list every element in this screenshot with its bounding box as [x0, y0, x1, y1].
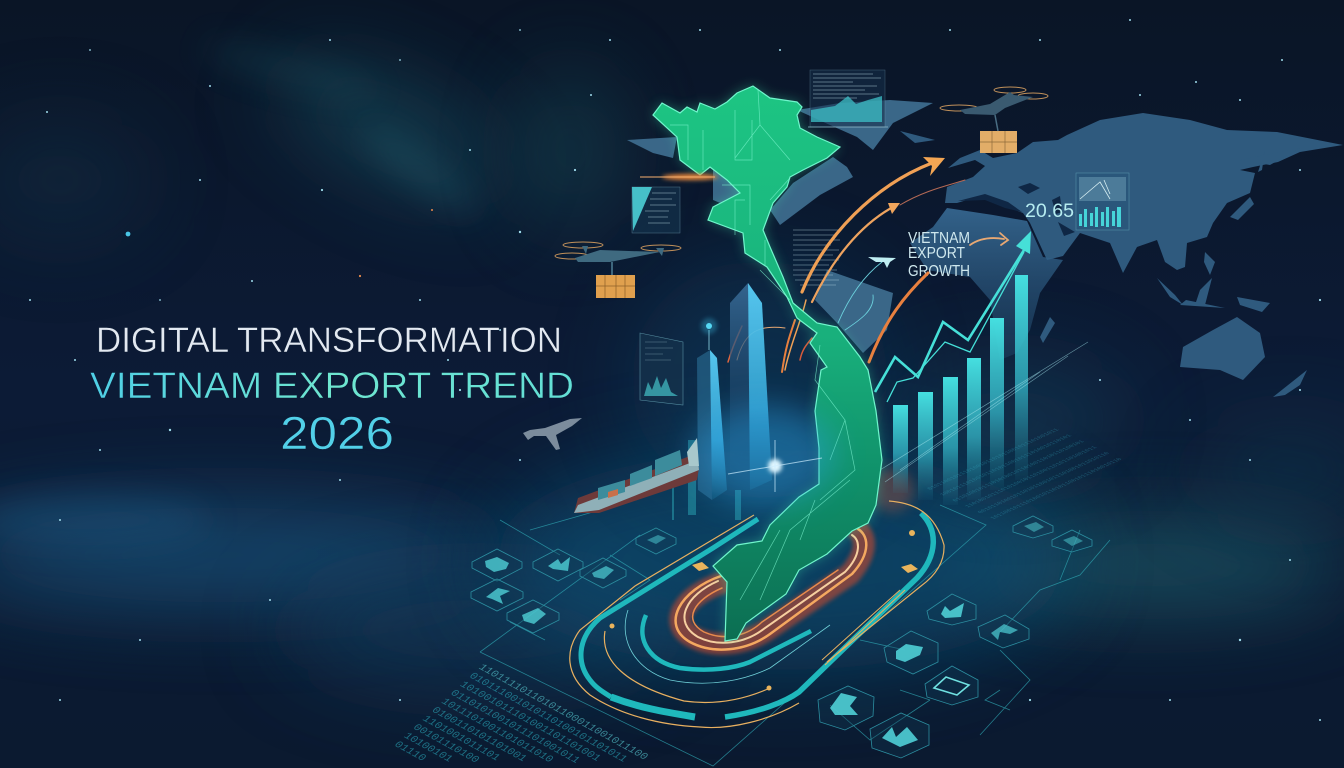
title block — [90, 321, 574, 459]
light beams under towers — [672, 440, 741, 520]
binary code floor: 0110101001011101001011 — [447, 688, 582, 766]
hex icon 8 — [978, 615, 1029, 648]
growth bar chart — [893, 275, 1028, 505]
orange export arrows — [728, 157, 1008, 372]
hex icon 2 — [533, 549, 583, 581]
binary field right: 1001011101001011010110010111010010110101 — [938, 433, 1074, 497]
hex icons group — [471, 516, 1092, 758]
parcel — [980, 131, 1017, 153]
binary code floor: 01110 — [391, 740, 428, 764]
Vietnam: internal circuit lines — [670, 90, 855, 600]
growth trend lines with arrow — [875, 231, 1031, 402]
hex icon 3 — [580, 558, 626, 588]
title line 3: year: 2026 — [280, 407, 394, 459]
hex icon 11 — [818, 686, 874, 730]
binary code floor: 11011110110101100011001011100 — [475, 663, 650, 762]
binary code floor: 10100101 — [400, 731, 455, 765]
hex icon 1 — [472, 549, 522, 581]
map: Eurasia — [945, 113, 1343, 273]
arrow: small label arrow — [970, 233, 1008, 245]
map inset: data chart — [1076, 173, 1129, 230]
Vietnam map — [653, 86, 882, 641]
binary code floor: 0100110101101001 — [428, 706, 529, 764]
chart label: Vietnam export growth: GROWTH — [908, 263, 970, 280]
circuit platform — [480, 505, 1110, 766]
binary field right: 1101001011101010010110100110101101001011 — [963, 445, 1099, 508]
hex icon 4 — [471, 579, 523, 611]
map: Americas and Greenland — [627, 100, 933, 353]
binary field right — [925, 427, 1124, 520]
title line 2: VIETNAM EXPORT TREND — [90, 365, 574, 406]
hex icon 12 — [870, 713, 929, 758]
binary field right: 1011001011101001011010110010111010010110 — [988, 457, 1124, 520]
ring: inner teal band — [642, 615, 811, 670]
hex icon 13 — [1013, 516, 1053, 538]
tower: tall — [730, 283, 772, 490]
world map — [627, 100, 1343, 397]
chart label: Vietnam export growth — [908, 230, 970, 280]
track: orange glow inner ring — [676, 529, 866, 650]
chart label: Vietnam export growth: VIETNAM — [908, 230, 970, 247]
parcel — [596, 275, 635, 298]
orange flare — [640, 174, 718, 180]
light flare at city base — [695, 405, 835, 505]
map value label: 20.65 — [1025, 201, 1074, 222]
hex icon 6 — [636, 528, 676, 554]
airplane — [523, 418, 582, 450]
binary field right: 0110100101110101001011010011010110100101 — [951, 439, 1087, 503]
track: orange thin rings — [570, 501, 944, 728]
ring: outer teal band — [581, 519, 758, 697]
map: Africa — [910, 208, 1063, 360]
tower: small — [697, 350, 727, 500]
drone: left with parcel — [555, 242, 681, 298]
track: markers — [610, 530, 918, 690]
routes: thin cyan to small drone — [838, 262, 882, 330]
thin light streaks across bars — [880, 342, 1088, 482]
title line 1: DIGITAL TRANSFORMATION — [96, 321, 562, 360]
hex icon 7 — [927, 594, 976, 625]
data panel: left with triangle — [632, 187, 680, 233]
hex icon 5 — [507, 600, 559, 633]
binary code floor: 00101110100 — [410, 723, 481, 766]
data panel: text over Americas — [793, 230, 841, 285]
arrow: main to Europe — [802, 157, 945, 292]
arrow: lower to Africa — [869, 273, 928, 362]
data panel: top — [808, 70, 888, 127]
cargo ship — [574, 438, 699, 513]
chart label: Vietnam export growth: EXPORT — [908, 245, 965, 262]
hex icon 10 — [925, 666, 978, 705]
binary field right: 0101100101110100101101011001011101001011 — [925, 427, 1061, 491]
track: teal race rings — [581, 513, 933, 717]
binary code floor: 101001011101001101101001 — [456, 680, 603, 764]
hex icon 9 — [884, 631, 938, 674]
binary code floor — [391, 663, 650, 766]
hex icon 14 — [1052, 530, 1092, 552]
map: inland seas — [958, 183, 1075, 236]
binary code floor: 1011101001101011010 — [438, 697, 555, 765]
map: islands — [900, 131, 1307, 397]
binary code floor: 010111001010110100101101011 — [466, 671, 629, 765]
arrows: small near towers — [728, 300, 812, 372]
binary field right: 0010110100101101011001011101001011010110 — [976, 451, 1112, 514]
arrow: second to Europe — [812, 180, 965, 302]
drone: top right with parcel — [940, 87, 1048, 153]
binary code floor: 1101001011101 — [419, 714, 502, 763]
data panel: lower left chart — [640, 333, 683, 405]
skyscrapers — [697, 283, 772, 500]
glow at the base of the bars — [870, 468, 914, 512]
small drone — [868, 257, 896, 268]
